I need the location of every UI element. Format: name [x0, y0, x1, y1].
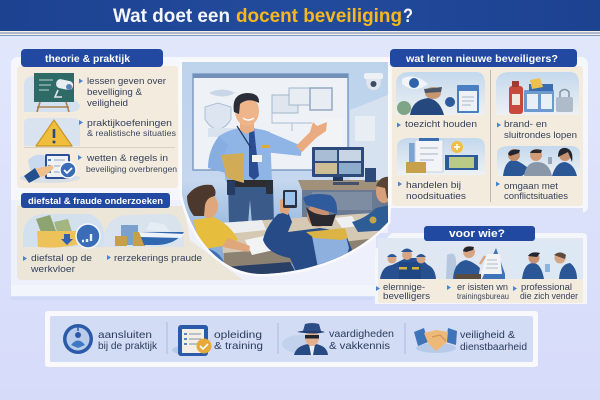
- wall notes: [355, 116, 375, 141]
- text: veiligheid & dienstbaarheid: veiligheid &: [460, 329, 515, 341]
- bullet: omgaan met conflictsituaties: [496, 181, 568, 202]
- header banner: [0, 0, 600, 36]
- panel: voor wie?: [375, 226, 587, 304]
- bullet: elernnige-bevelligers: [376, 282, 430, 302]
- icon: chalkboard with camera: [24, 73, 80, 112]
- bullet: diefstal op de werkvloer: diefstal op de: [31, 253, 92, 264]
- table: [222, 213, 386, 274]
- bullet: er isisten trainingsbureau: trainingsbureau: [457, 291, 509, 301]
- bullet: professional die zich vender: professional: [521, 282, 572, 293]
- bullet: lessen geven over: lessen geven over: [87, 76, 167, 87]
- heading: theorie & praktijk: theorie & praktijk: [45, 54, 130, 65]
- text: opleiding & training: & training: [214, 340, 263, 352]
- heading: wat leren nieuwe beveiligers?: [390, 49, 577, 67]
- bullet: omgaan met conflictsituaties: conflictsituaties: [504, 191, 568, 202]
- heading: diefstal & fraude onderzoeken: diefstal & fraude onderzoeken: [28, 196, 163, 207]
- bullet: elernnige-bevelligers: elernnige-: [383, 282, 425, 293]
- bullet: lessen geven over: veiligheid: [87, 98, 128, 109]
- bullet: elernnige-bevelligers: bevelligers: [383, 291, 430, 302]
- bullet: wetten & regels: [78, 153, 177, 174]
- title: [113, 5, 413, 27]
- bullet: wetten & regels: beveiliging overbrengen: [86, 164, 177, 174]
- icon: box with money: [23, 214, 104, 248]
- bullet: praktijkoefeningen: [79, 118, 176, 138]
- bullet: toezicht houden: toezicht houden: [405, 119, 477, 130]
- bullet: rerzekerings praude: rerzekerings praude: [114, 253, 202, 264]
- text: vaardigheden & vakkennis: [329, 328, 394, 352]
- bullet: diefstal op de werkvloer: werkvloer: [30, 264, 76, 275]
- icon: brand- en sluitrondes: [496, 72, 579, 115]
- panel: wat leren nieuwe beveiligers?: [390, 49, 583, 206]
- icon: security camera: [364, 73, 383, 90]
- student: right: [352, 177, 392, 232]
- text: veiligheid & dienstbaarheid: dienstbaarheid: [460, 341, 527, 353]
- footer strip: [45, 311, 538, 367]
- title: docent beveiliging: [236, 5, 402, 27]
- icon: spy with hat: [282, 323, 328, 355]
- bullet: lessen geven over: bevelliging &: [87, 87, 143, 98]
- bullet: brand- en sluitrondes lopen: [497, 119, 577, 141]
- bullet: praktijkoefeningen: & realistische situaties: [87, 128, 176, 138]
- heading: voor wie?: voor wie?: [449, 228, 505, 240]
- icon: toezicht houden: [396, 72, 485, 115]
- bullet: handelen bij noodsituaties: [398, 180, 466, 202]
- icon: aansluiten: [63, 324, 93, 354]
- bullet: wetten & regels: wetten & regels in: [86, 153, 168, 164]
- bullet: omgaan met conflictsituaties: omgaan met: [504, 181, 558, 192]
- icon: two professionals talking: [513, 243, 580, 279]
- text: opleiding & training: [214, 329, 263, 352]
- bullet: handelen bij noodsituaties: handelen bij: [406, 180, 461, 191]
- icon: group of guards: [380, 248, 436, 279]
- student: navy uniform with phone: [263, 190, 352, 276]
- bullet: brand- en sluitrondes lopen: sluitrondes lopen: [504, 130, 577, 141]
- icon: warning triangle: [24, 118, 80, 146]
- icon: opleiding checklist: [172, 325, 212, 356]
- bullet: professional die zich vender: die zich vender: [520, 291, 579, 302]
- teacher: [208, 93, 327, 224]
- whiteboard: [193, 74, 348, 170]
- text: aansluiten bij de praktijk: bij de praktijk: [98, 340, 158, 352]
- illustration: classroom scene: [180, 60, 392, 280]
- text: opleiding & training: opleiding: [214, 329, 262, 341]
- student: yellow shirt: [187, 185, 250, 262]
- panel: theorie & praktijk: [17, 49, 178, 188]
- icon: coins and boat: [104, 214, 184, 247]
- text: veiligheid & dienstbaarheid: [460, 329, 527, 353]
- text: vaardigheden & vakkennis: & vakkennis: [329, 340, 390, 352]
- heading: wat leren nieuwe beveiligers?: wat leren nieuwe beveiligers?: [405, 54, 558, 65]
- icon: handshake: [414, 328, 457, 353]
- bullet: diefstal op de werkvloer: [23, 253, 92, 275]
- title: ?: [403, 5, 413, 27]
- heading: theorie & praktijk: [21, 49, 163, 67]
- bullet: handelen bij noodsituaties: noodsituaties: [406, 191, 466, 202]
- bullet: professional die zich vender: [513, 282, 579, 302]
- bullet: er isisten trainingsbureau: er isisten wn: [457, 282, 508, 293]
- icon: trainer with flipchart: [446, 246, 505, 279]
- text: aansluiten bij de praktijk: aansluiten: [98, 329, 152, 341]
- heading: diefstal & fraude onderzoeken: [21, 193, 170, 208]
- text: vaardigheden & vakkennis: vaardigheden: [329, 328, 394, 340]
- bullet: er isisten trainingsbureau: [447, 282, 509, 301]
- bullet: praktijkoefeningen: praktijkoefeningen: [87, 118, 172, 129]
- icon: omgaan met conflictsituaties: [497, 146, 580, 176]
- bullet: lessen geven over: [79, 76, 167, 109]
- title: Wat doet een: [113, 5, 230, 27]
- text: aansluiten bij de praktijk: [98, 329, 158, 352]
- icon: handelen bij noodsituaties: [397, 138, 485, 175]
- panel: diefstal & fraude onderzoeken: [17, 193, 243, 280]
- bullet: brand- en sluitrondes lopen: brand- en: [504, 119, 547, 130]
- desk with monitor: [298, 147, 390, 217]
- panel: background card: [11, 57, 588, 300]
- heading: voor wie?: [424, 226, 535, 241]
- icon: checklist with hand: [20, 154, 80, 183]
